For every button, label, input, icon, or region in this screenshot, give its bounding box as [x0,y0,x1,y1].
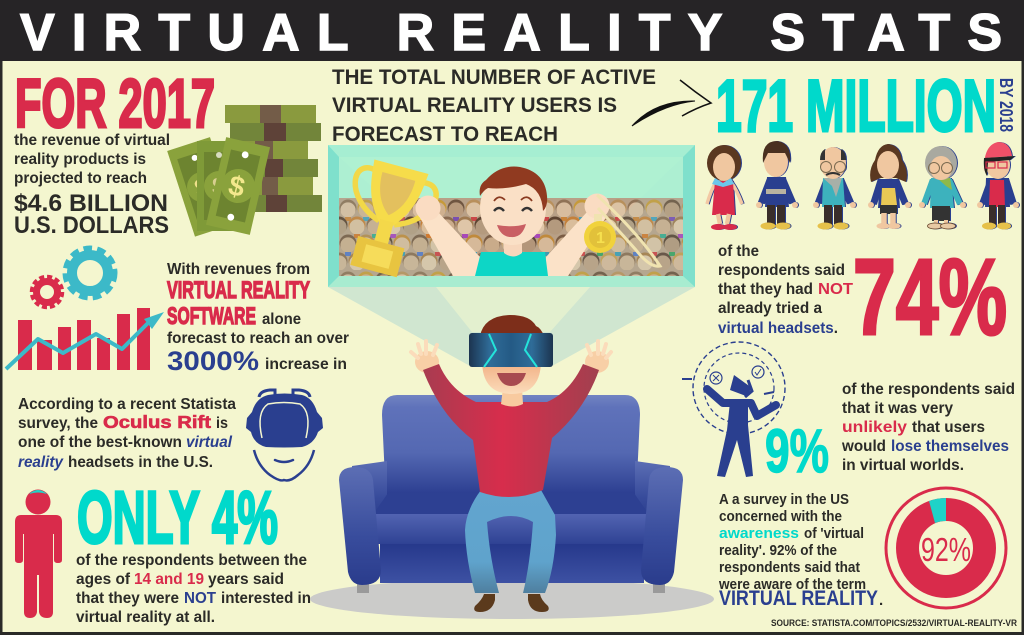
heading: total active users: FORECAST TO REACH [332,123,558,146]
4% body text: virtual reality at all. [76,609,215,626]
panel: only 4% [15,476,311,626]
4% body text: 14 and 19 [134,571,204,588]
survey text: respondents said that [719,559,860,576]
icon: small gear [32,277,62,307]
shadow under sofa [310,579,714,619]
survey text: were aware of the term [718,576,866,593]
heading: total active users [332,66,656,146]
heading: total active users: THE TOTAL NUMBER OF ACTIVE [332,66,656,89]
software text: VIRTUAL REALITY [167,277,310,304]
panel: software revenue [6,248,349,376]
person 3 [813,147,856,230]
icon: trophy [334,156,441,282]
4% body text [76,552,311,626]
jeans [465,490,556,593]
heading: only 4%: ONLY 4% [77,476,278,559]
74% text: NOT [818,281,854,298]
software text: 3000% [167,346,259,376]
person 5 [919,146,966,229]
9% text: that it was very [842,400,953,417]
stat: 9% [682,342,1015,485]
VR goggles [469,333,553,367]
oculus text: is [216,415,228,432]
9% text: would [841,438,886,455]
icon: money stack and bills: $ [226,169,248,203]
donut chart: 92%: 92% [921,531,971,568]
light overlay [339,157,683,276]
software text: SOFTWARE [167,303,256,330]
4% body text: ages of [76,571,131,588]
9% text: unlikely [842,419,907,436]
oculus text [18,396,236,471]
software text: increase in [265,356,347,373]
person 6 [977,142,1019,230]
9% text: of the respondents said [842,381,1015,398]
person in VR headset [411,315,611,612]
face [482,360,541,394]
panel: VR projection [328,145,695,366]
projection beam [328,287,695,366]
oculus text: According to a recent Statista [18,396,236,413]
74% text: of the [718,243,759,260]
revenue text: $4.6 BILLION [14,190,168,217]
sweater [423,364,599,497]
revenue text: reality products is [14,151,146,168]
oculus text: survey, the [18,415,98,432]
big 9%: 9% [765,417,829,485]
9% text: that users [912,419,985,436]
icon: large gear [66,248,114,298]
heading: for 2017: FOR 2017 [15,65,215,142]
oculus text: reality [18,454,64,471]
oculus text: one of the best-known [18,434,182,451]
survey text: concerned with the [719,508,842,525]
survey text: of 'virtual [804,525,864,542]
person 1 [707,145,742,230]
74% text: that they had [718,281,813,298]
survey text: reality'. 92% of the [719,542,837,559]
revenue text: the revenue of virtual [14,132,170,149]
donut chart: 92% [886,488,1006,608]
icon: VR headset on face [246,390,323,480]
icon: money stack and bills: $ [212,173,226,200]
crowd [339,198,683,276]
icon: person [15,490,62,618]
74% text: virtual headsets. [718,320,838,337]
survey text: A a survey in the US [719,491,849,508]
software text [167,261,349,376]
person 2 [756,141,798,230]
person 4 [868,144,911,229]
revenue text [14,132,170,239]
revenue text: U.S. DOLLARS [14,212,169,239]
4% body text: of the respondents between the [76,552,307,569]
arrow [632,80,711,126]
9% text: lose themselves [891,438,1009,455]
4% body text: interested in [221,590,311,607]
neck [501,388,523,406]
hair [480,315,544,336]
icon: money stack and bills [167,105,322,237]
oculus text: Oculus Rift [103,412,211,432]
mouth [497,373,526,386]
panel: awareness survey [718,488,1006,610]
heading: total active users: VIRTUAL REALITY USERS IS [332,94,617,117]
icon: medal [584,195,660,266]
4% body text: years said [208,571,284,588]
74% text [718,243,854,337]
9% text: in virtual worlds. [842,457,964,474]
panel: 2017 revenue [14,65,322,239]
icon: medal: 1 [596,230,605,247]
software text: With revenues from [167,261,310,278]
4% body text: that they were [76,590,179,607]
software text: alone [262,311,301,328]
stat: 74% [718,236,1007,357]
by 2018: BY 2018 [996,78,1016,132]
projection screen frame [328,145,695,287]
oculus text: virtual [186,434,233,451]
sofa [339,395,683,593]
oculus text: headsets in the U.S. [68,454,213,471]
revenue text: projected to reach [14,170,147,187]
people row [707,141,1019,230]
hands [411,341,611,373]
survey text: awareness [719,525,799,542]
survey text: . [879,592,883,609]
74% text: respondents said [718,262,845,279]
panel: Oculus Rift [18,390,323,480]
icon: money stack and bills: $ [191,172,213,202]
survey text [718,491,883,610]
boy on screen [416,167,610,276]
74% text: already tried a [718,300,822,317]
icon: VR user with dashed circles [682,342,785,477]
4% body text: NOT [184,590,217,607]
bar chart with trend line [6,308,164,370]
software text: forecast to reach an over [167,330,349,347]
title banner: VIRTUAL REALITY STATS [20,4,1002,62]
shoes [474,594,549,612]
9% text [841,381,1015,474]
survey text: VIRTUAL REALITY [719,587,878,610]
